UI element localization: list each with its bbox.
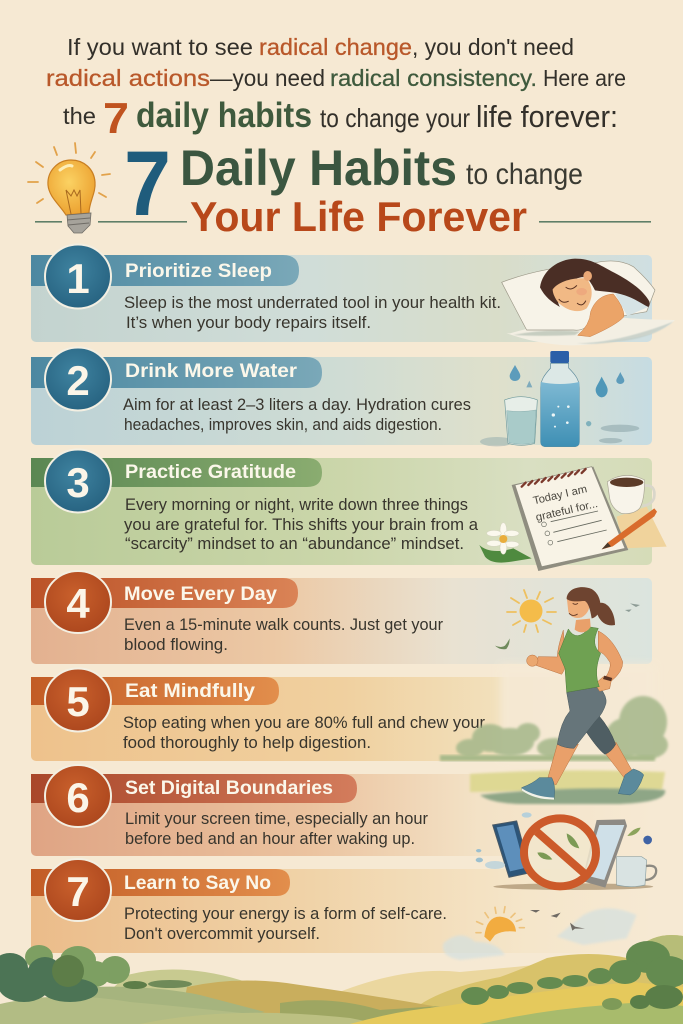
title: 7 <box>124 133 171 235</box>
panel: habit 5 <box>31 668 652 761</box>
icon: rising sun and birds <box>443 907 637 960</box>
intro text: , you don't need <box>412 34 574 60</box>
intro text <box>46 34 626 143</box>
intro text: If you want to see <box>67 34 253 60</box>
habit 5 text: food thoroughly to help digestion. <box>123 733 371 752</box>
habit 1 heading: Prioritize Sleep <box>125 260 272 282</box>
panel: habit 7 <box>31 859 652 953</box>
habit 4 number badge <box>45 571 111 633</box>
icon: gratitude notebook, coffee and pencil: Today I am <box>532 483 588 507</box>
habit 3 number badge: 3 <box>66 459 90 506</box>
icon: sleeping woman <box>502 259 675 345</box>
habit 3 number badge <box>45 450 111 512</box>
habit 4 heading: Move Every Day <box>124 583 277 605</box>
intro text: radical consistency. <box>330 65 537 91</box>
panel: habit 4 <box>31 571 652 664</box>
habit 2 text <box>123 395 471 434</box>
title: to change <box>466 158 583 191</box>
landscape background for footer <box>0 935 683 1024</box>
habit 6 text: Limit your screen time, especially an hour <box>125 809 428 828</box>
habit 6 heading: Set Digital Boundaries <box>125 777 333 799</box>
habit 6 text: before bed and an hour after waking up. <box>125 829 415 848</box>
habit 7 text: Protecting your energy is a form of self-care. <box>124 904 447 923</box>
title <box>124 133 583 240</box>
habit 6 text <box>125 809 428 848</box>
habit 1 number badge <box>45 244 111 308</box>
habit 7 text: Don't overcommit yourself. <box>124 924 320 943</box>
habit 3 text: you are grateful for. This shifts your brain from a <box>124 515 479 534</box>
habit 4 text: Even a 15-minute walk counts. Just get your <box>124 615 443 634</box>
panel: habit 2 <box>31 348 652 445</box>
habit 7 heading: Learn to Say No <box>124 872 271 894</box>
intro text: daily habits <box>136 96 312 135</box>
intro text: —you need <box>210 65 325 91</box>
habit 3 text: Every morning or night, write down three things <box>125 495 468 514</box>
trees: right <box>461 941 683 1010</box>
habit 5 number badge: 5 <box>66 678 90 725</box>
habit 6 number badge: 6 <box>66 774 90 821</box>
intro text: life forever: <box>476 99 618 134</box>
habit 5 heading: Eat Mindfully <box>125 680 255 702</box>
intro text: Here are <box>543 65 626 91</box>
panel: habit 1 <box>31 244 652 342</box>
habit 1 text: Sleep is the most underrated tool in your health kit. <box>124 293 501 312</box>
habit 7 text <box>124 904 447 943</box>
panel: habit 6 <box>31 765 652 856</box>
habit 1 heading <box>31 255 299 286</box>
habit 5 text <box>123 713 485 752</box>
icon: no phones sign <box>476 812 656 890</box>
habit 1 number badge: 1 <box>66 255 90 302</box>
habit 7 number badge <box>45 859 111 921</box>
intro text: radical actions <box>46 65 210 91</box>
habit 2 heading <box>31 357 322 388</box>
habit 2 heading: Drink More Water <box>125 360 297 382</box>
intro text: 7 <box>103 94 129 143</box>
habit 5 heading <box>31 677 279 705</box>
intro text: radical change <box>259 34 412 60</box>
habit 7 number badge: 7 <box>66 868 90 915</box>
habit 4 text <box>124 615 443 654</box>
icon: water bottle and glass <box>480 351 639 447</box>
icon: gratitude notebook, coffee and pencil: grateful for... <box>535 498 599 524</box>
habit 6 heading <box>31 774 357 803</box>
habit 2 number badge <box>45 348 111 410</box>
icon: light bulb <box>28 143 110 233</box>
habit 1 text <box>124 293 501 332</box>
title: Daily Habits <box>180 140 457 196</box>
habit 1 text: It’s when your body repairs itself. <box>126 313 371 332</box>
habit 4 text: blood flowing. <box>124 635 228 654</box>
habit 2 text: Aim for at least 2–3 liters a day. Hydration cures <box>123 395 471 414</box>
habit 3 heading <box>31 458 322 487</box>
habit 5 text: Stop eating when you are 80% full and chew your <box>123 713 485 732</box>
habit 4 number badge: 4 <box>66 580 90 627</box>
title: Your Life Forever <box>190 193 527 240</box>
habit 2 text: headaches, improves skin, and aids digestion. <box>124 415 442 434</box>
habit 7 heading <box>31 869 290 896</box>
bushes and meadow <box>440 664 668 804</box>
habit 2 number badge: 2 <box>66 357 90 404</box>
icon: sun by runner <box>507 590 556 632</box>
habit 3 heading: Practice Gratitude <box>125 461 296 483</box>
icon: gratitude notebook, coffee and pencil <box>479 467 667 571</box>
habit 6 number badge <box>45 765 111 827</box>
intro text: the <box>63 103 96 129</box>
trees: left <box>0 945 192 1002</box>
habit 5 number badge <box>45 668 111 732</box>
panel: habit 3 <box>31 450 652 565</box>
intro text: to change your <box>320 103 470 133</box>
icon: walking woman <box>495 587 644 800</box>
habit 3 text <box>124 495 479 553</box>
habit 4 heading <box>31 578 298 608</box>
habit 3 text: “scarcity” mindset to an “abundance” mindset. <box>125 534 464 553</box>
